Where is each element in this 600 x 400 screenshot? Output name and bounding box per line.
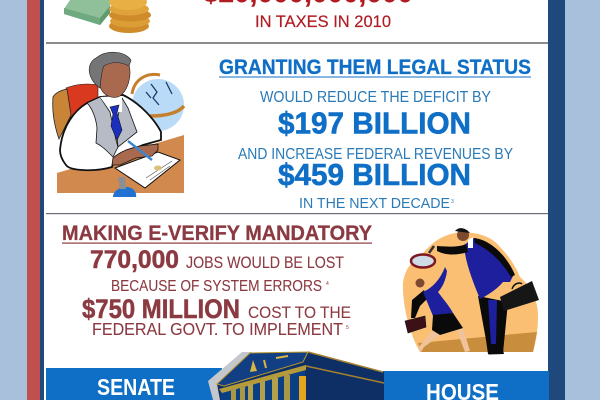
side wall	[217, 352, 384, 400]
worker arm	[411, 290, 428, 318]
divider middle	[46, 213, 548, 214]
shadow edge	[208, 352, 252, 400]
shirt collar and tie	[100, 96, 122, 112]
section: e-verify: 4	[326, 281, 329, 287]
boss legs	[478, 296, 508, 354]
worker head	[416, 278, 424, 288]
section: e-verify: 770,000	[90, 246, 179, 274]
panel: senate banner	[46, 368, 222, 400]
section: legal status: 3	[451, 199, 454, 205]
pen holder	[113, 187, 136, 197]
section: legal status: $459 BILLION	[278, 157, 471, 192]
left page border	[0, 0, 44, 400]
pediment figures	[250, 360, 257, 372]
section: e-verify: FEDERAL GOVT. TO IMPLEMENT	[92, 319, 343, 339]
boss body	[464, 238, 513, 299]
section: e-verify: JOBS WOULD BE LOST	[186, 254, 344, 272]
section: e-verify: 5	[346, 325, 349, 331]
panel: house banner	[383, 371, 549, 400]
magnifier	[411, 254, 435, 268]
tax figure text	[203, 0, 413, 31]
icon: money and coins	[64, 0, 151, 33]
section: legal status: AND INCREASE FEDERAL REVENUES BY	[238, 146, 513, 163]
section: e-verify: BECAUSE OF SYSTEM ERRORS	[111, 278, 322, 295]
worker legs	[418, 331, 442, 352]
hair	[89, 52, 131, 88]
panel: senate banner: SENATE	[97, 374, 175, 400]
icon: businessman at desk with globe	[53, 52, 184, 197]
section: legal status	[219, 55, 531, 212]
right page border	[548, 0, 600, 400]
heading: granting them legal status: GRANTING THEM LEGAL STATUS	[219, 55, 531, 79]
globe	[132, 79, 184, 131]
section: e-verify: $750 MILLION	[82, 294, 240, 324]
orange backdrop	[403, 232, 538, 352]
tax figure text: IN TAXES IN 2010	[255, 12, 391, 31]
pediment	[217, 352, 308, 386]
boss head	[457, 229, 469, 241]
heading: making e-verify mandatory: MAKING E-VERIFY MANDATORY	[62, 221, 372, 245]
worker jacket	[423, 267, 453, 316]
desk	[57, 135, 184, 193]
section: e-verify: COST TO THE	[248, 303, 351, 322]
head	[99, 61, 130, 97]
section: legal status: WOULD REDUCE THE DEFICIT BY	[260, 89, 491, 106]
worker skirt	[432, 313, 463, 335]
paper	[115, 152, 180, 188]
columns interior	[220, 368, 305, 400]
section: e-verify	[62, 221, 372, 339]
boss shoes	[488, 350, 504, 354]
entablature	[219, 365, 306, 393]
section: legal status: IN THE NEXT DECADE	[299, 196, 450, 212]
hand and pen	[112, 144, 158, 165]
chair back	[66, 84, 98, 118]
body	[60, 95, 161, 170]
worker briefcase	[405, 316, 426, 333]
boss briefcase	[500, 281, 539, 311]
icon: capitol building	[208, 352, 384, 400]
icon: boss inspecting worker with magnifier	[403, 228, 539, 354]
section: legal status: $197 BILLION	[278, 106, 471, 140]
boss arm	[437, 244, 468, 255]
vest	[87, 97, 118, 157]
divider top	[46, 42, 548, 44]
